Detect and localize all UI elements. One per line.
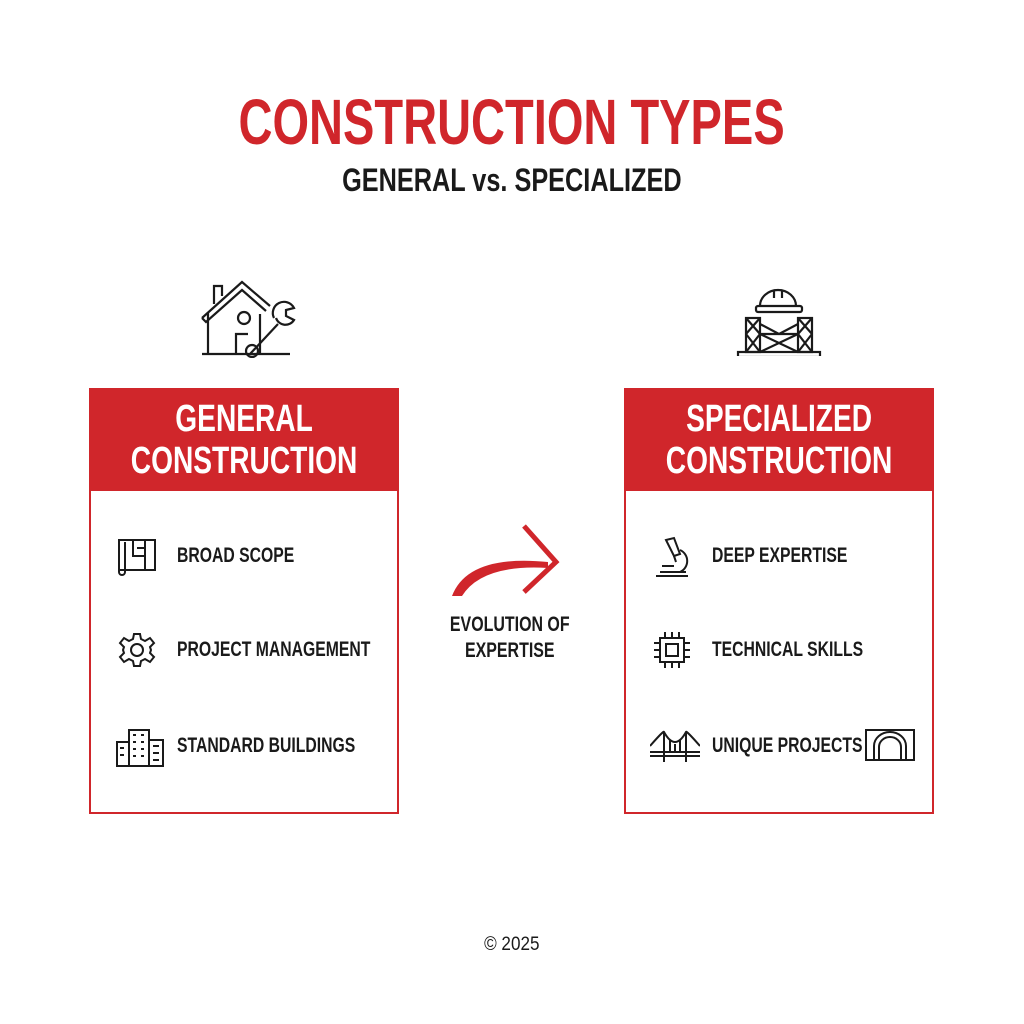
label: evolution of expertise: EXPERTISE: [465, 639, 555, 662]
icon: tunnel: [865, 729, 915, 761]
item: broad scope: BROAD SCOPE: [177, 544, 294, 567]
label: evolution of expertise: EVOLUTION OF: [450, 613, 570, 636]
icon: house with wrench: [201, 280, 296, 358]
item: technical skills: TECHNICAL SKILLS: [712, 638, 863, 661]
item: unique projects: [650, 729, 915, 762]
heading: general: GENERAL: [175, 398, 313, 440]
heading: specialized: CONSTRUCTION: [666, 440, 892, 482]
label: evolution of expertise: [450, 613, 570, 662]
item: unique projects: UNIQUE PROJECTS: [712, 734, 863, 757]
panel: specialized construction: [624, 388, 934, 814]
item: deep expertise: [656, 536, 847, 577]
icon: scaffold with hard hat: [736, 288, 822, 356]
item: standard buildings: STANDARD BUILDINGS: [177, 734, 355, 757]
item: project management: [118, 633, 370, 667]
panel: general construction: [89, 388, 399, 814]
item: broad scope: [118, 539, 294, 576]
arrow: evolution: [452, 524, 560, 596]
item: standard buildings: [116, 729, 355, 767]
heading: general: [91, 390, 397, 491]
heading: general: CONSTRUCTION: [131, 440, 357, 482]
heading: specialized: SPECIALIZED: [686, 398, 872, 440]
title: CONSTRUCTION TYPES: [239, 86, 785, 158]
subtitle: GENERAL vs. SPECIALIZED: [342, 162, 682, 198]
heading: specialized: [626, 390, 932, 491]
item: project management: PROJECT MANAGEMENT: [177, 638, 370, 661]
item: technical skills: [654, 632, 863, 668]
item: deep expertise: DEEP EXPERTISE: [712, 544, 847, 567]
footer: © 2025: [484, 934, 540, 955]
